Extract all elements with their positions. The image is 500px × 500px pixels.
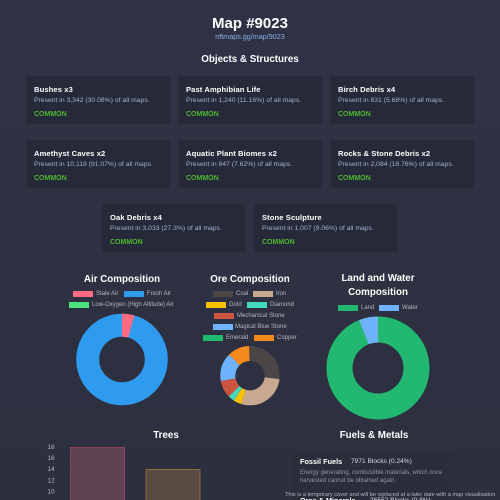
footer notice: This is a temporary cover and will be replaced at a later date with a map visualisation. bbox=[285, 492, 497, 498]
card: stone sculpture bbox=[254, 204, 398, 252]
donut chart: ore bbox=[220, 346, 280, 406]
heading: land and water composition: Land and Water bbox=[341, 273, 415, 284]
map link: nftmaps.gg/map/9023 bbox=[215, 32, 285, 41]
bar chart: trees: 10 bbox=[47, 488, 55, 496]
card: aquatic plant biomes: COMMON bbox=[186, 175, 219, 182]
card: birch debris: Birch Debris x4 bbox=[338, 85, 395, 94]
card: past amphibian life: Present in 1,240 (11.16%) of all maps. bbox=[186, 97, 301, 104]
card: oak debris: COMMON bbox=[110, 239, 143, 246]
card: stone sculpture: COMMON bbox=[262, 239, 295, 246]
heading: ore composition: Ore Composition bbox=[210, 274, 290, 285]
heading: trees: Trees bbox=[153, 430, 179, 441]
heading: land and water composition: Composition bbox=[348, 287, 408, 298]
card: birch debris bbox=[330, 76, 474, 124]
legend: air: Low-Oxygen (High Altitude) Air bbox=[92, 302, 174, 308]
legend: land and water: Land bbox=[361, 304, 374, 310]
card: amethyst caves: Present in 10,119 (91.07%) of all maps. bbox=[34, 161, 153, 168]
card: birch debris: Present in 631 (5.68%) of all maps. bbox=[338, 97, 444, 104]
card: oak debris: Oak Debris x4 bbox=[110, 213, 162, 222]
card: oak debris: Present in 3,033 (27.3%) of all maps. bbox=[110, 225, 222, 232]
legend: ore: Iron bbox=[276, 290, 286, 296]
card: past amphibian life: Past Amphibian Life bbox=[186, 85, 261, 94]
card: amethyst caves bbox=[26, 140, 170, 188]
panel: fossil fuels bbox=[292, 452, 454, 500]
heading: land and water composition bbox=[341, 273, 415, 298]
legend: ore: Coal bbox=[236, 290, 248, 296]
card: oak debris bbox=[102, 204, 246, 252]
card: past amphibian life: COMMON bbox=[186, 111, 219, 118]
donut chart: air bbox=[76, 314, 168, 406]
card: stone sculpture: Stone Sculpture bbox=[262, 213, 322, 222]
description: fossil fuels: Energy generating, combustible materials, which once harvested cannot be obtained again. bbox=[300, 470, 442, 484]
legend: land and water: Water bbox=[402, 304, 418, 310]
card: bushes bbox=[26, 76, 170, 124]
bar chart: trees: 18 bbox=[47, 444, 55, 451]
card: bushes: Bushes x3 bbox=[34, 85, 73, 94]
panel: ore composition bbox=[203, 274, 297, 341]
legend: ore: Gold bbox=[229, 302, 242, 308]
legend: ore: Copper bbox=[277, 334, 297, 340]
legend: air: Fresh Air bbox=[147, 290, 171, 296]
bar chart: trees bbox=[47, 444, 200, 500]
bar chart: trees: 14 bbox=[47, 466, 55, 473]
bar chart: trees: 16 bbox=[47, 455, 55, 462]
legend: ore: Magical Blue Stone bbox=[235, 324, 287, 330]
card: rocks and stone debris: Present in 2,084 (18.76%) of all maps. bbox=[338, 161, 454, 168]
card: rocks and stone debris: COMMON bbox=[338, 175, 371, 182]
legend: ore: Mechanical Stone bbox=[237, 312, 285, 318]
card: rocks and stone debris bbox=[330, 140, 474, 188]
label: fossil fuels: Fossil Fuels bbox=[300, 457, 342, 466]
card: bushes: COMMON bbox=[34, 111, 67, 118]
donut chart: land and water bbox=[326, 316, 430, 420]
card: aquatic plant biomes: Aquatic Plant Biomes x2 bbox=[186, 149, 277, 158]
card: amethyst caves: Amethyst Caves x2 bbox=[34, 149, 105, 158]
card: past amphibian life bbox=[178, 76, 322, 124]
card: stone sculpture: Present in 1,007 (9.06%) of all maps. bbox=[262, 225, 374, 232]
legend: air bbox=[69, 290, 174, 308]
bar chart: trees: 12 bbox=[47, 478, 55, 484]
panel: air composition bbox=[69, 274, 174, 308]
card: aquatic plant biomes bbox=[178, 140, 322, 188]
legend: ore bbox=[203, 290, 297, 341]
legend: ore: Emerald bbox=[226, 334, 248, 340]
card: aquatic plant biomes: Present in 847 (7.62%) of all maps. bbox=[186, 161, 292, 168]
heading: objects and structures: Objects & Structures bbox=[201, 54, 299, 65]
title: Map #9023 bbox=[212, 15, 288, 32]
heading: air composition: Air Composition bbox=[84, 274, 160, 285]
card: bushes: Present in 3,342 (30.08%) of all maps. bbox=[34, 97, 150, 104]
heading: fuels and metals: Fuels & Metals bbox=[340, 430, 408, 441]
card: rocks and stone debris: Rocks & Stone Debris x2 bbox=[338, 149, 430, 158]
legend: air: Stale Air bbox=[96, 290, 118, 296]
legend: land and water bbox=[338, 304, 418, 311]
card: birch debris: COMMON bbox=[338, 111, 371, 118]
card: amethyst caves: COMMON bbox=[34, 175, 67, 182]
value: fossil fuels blocks: 7971 Blocks (0.24%) bbox=[351, 458, 412, 465]
panel: land and water composition bbox=[338, 273, 418, 311]
legend: ore: Diamond bbox=[270, 302, 294, 308]
